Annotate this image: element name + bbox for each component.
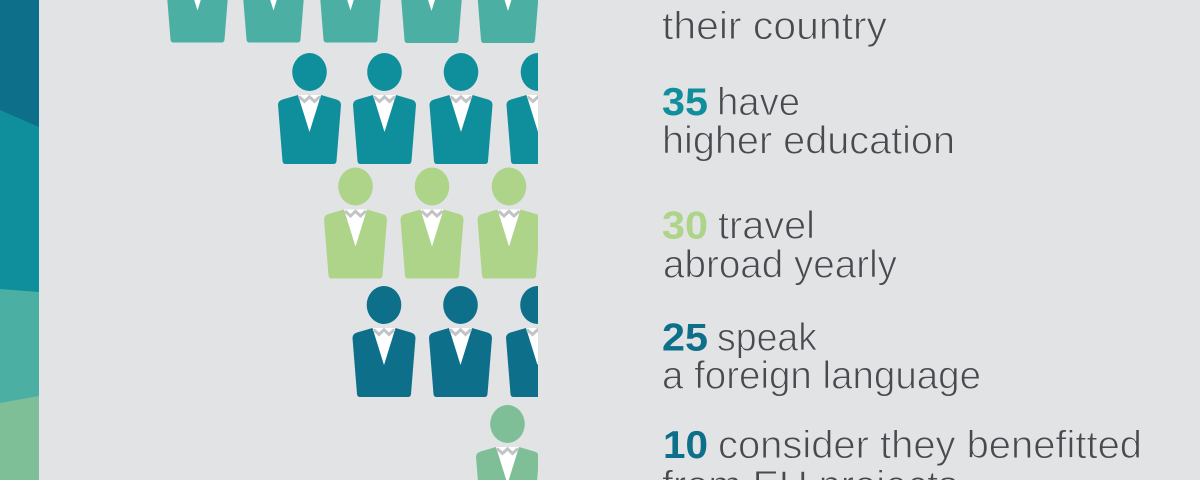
text: 10 consider they benefitted from EU projects: 10 (663, 424, 708, 467)
text: 30 travel abroad yearly: travel (718, 204, 815, 248)
text: their country: their country (662, 5, 888, 48)
left colour band (0, 0, 39, 480)
pictogram rows (166, 0, 570, 480)
text: 35 have higher education: have (717, 81, 800, 124)
text: 25 speak a foreign language: speak (717, 316, 817, 360)
row: light teal people (166, 0, 540, 43)
text: 10 consider they benefitted from EU projects (662, 424, 1142, 480)
text: 30 travel abroad yearly: 30 (662, 204, 708, 248)
row: dark blue people, 25 (352, 286, 538, 397)
row: green people, 30 (324, 168, 540, 278)
text: 25 speak a foreign language: a foreign language (662, 354, 981, 398)
row: soft green person, 10 (476, 405, 539, 480)
text: 30 travel abroad yearly (662, 204, 897, 286)
text: 10 consider they benefitted from EU projects: consider they benefitted (718, 424, 1142, 467)
text: 30 travel abroad yearly: abroad yearly (663, 244, 897, 286)
text: 35 have higher education (662, 81, 955, 162)
text: 25 speak a foreign language: 25 (662, 316, 708, 360)
text: 35 have higher education: higher education (662, 120, 955, 162)
row: teal people, 35 (278, 53, 538, 164)
text: 25 speak a foreign language (662, 316, 981, 398)
text: 35 have higher education: 35 (662, 81, 708, 124)
